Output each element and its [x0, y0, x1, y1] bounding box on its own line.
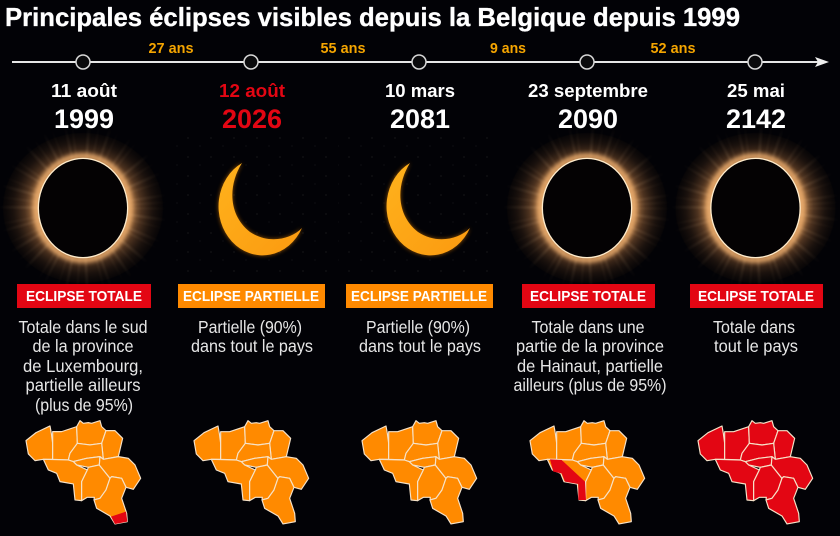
- interval labels: 55 ans: [320, 41, 366, 57]
- date: 11 août 1999: [51, 80, 117, 134]
- tag: eclipse partielle: [346, 284, 493, 308]
- description: ailleurs (plus de 95%): [514, 375, 666, 395]
- interval labels: 9 ans: [490, 41, 526, 57]
- map of Belgium: [698, 421, 813, 524]
- interval labels: [148, 41, 696, 57]
- description: Partielle (90%): [366, 317, 470, 337]
- date: 11 août 1999: 11 août: [51, 80, 117, 101]
- date: 10 mars 2081: [385, 80, 455, 134]
- date: 10 mars 2081: 2081: [390, 104, 450, 134]
- date: 12 août 2026: 12 août: [219, 80, 285, 101]
- map of Belgium: [362, 421, 477, 524]
- description: de Hainaut, partielle: [517, 356, 663, 376]
- timeline arrow: [12, 55, 829, 69]
- map of Belgium: [194, 421, 309, 524]
- icon: total eclipse: [674, 132, 836, 284]
- description: (plus de 95%): [35, 395, 133, 415]
- tag: eclipse totale: ECLIPSE TOTALE: [26, 288, 142, 305]
- date: 11 août 1999: 1999: [54, 104, 114, 134]
- map of Belgium: [530, 421, 645, 524]
- column: 2090: [506, 80, 668, 524]
- interval labels: 52 ans: [650, 41, 696, 57]
- tag: eclipse totale: ECLIPSE TOTALE: [530, 288, 646, 305]
- date: 25 mai 2142: 25 mai: [727, 80, 785, 101]
- description: Totale dans le sud: [18, 317, 148, 337]
- date: 23 septembre 2090: 23 septembre: [528, 80, 648, 101]
- description: [514, 317, 666, 395]
- description: partielle ailleurs: [26, 375, 141, 395]
- description: Totale dans: [713, 317, 795, 337]
- column: 1999: [2, 80, 164, 524]
- tag: eclipse partielle: [178, 284, 325, 308]
- description: dans tout le pays: [359, 336, 481, 356]
- icon: total eclipse: [506, 132, 668, 284]
- column: 2026: [170, 80, 330, 524]
- icon: total eclipse: [2, 132, 164, 284]
- description: [713, 317, 798, 356]
- title: Principales éclipses visibles depuis la Belgique depuis 1999: [5, 2, 740, 32]
- stars: [170, 135, 330, 275]
- icon: partial eclipse: [219, 163, 302, 255]
- date: 23 septembre 2090: 2090: [558, 104, 618, 134]
- description: Partielle (90%): [198, 317, 302, 337]
- description: [191, 317, 313, 356]
- tag: eclipse totale: [690, 284, 823, 308]
- description: [18, 317, 148, 415]
- stars: [338, 135, 498, 275]
- description: tout le pays: [714, 336, 798, 356]
- description: dans tout le pays: [191, 336, 313, 356]
- date: 12 août 2026: 2026: [222, 104, 282, 134]
- column: 2081: [338, 80, 498, 524]
- tag: eclipse totale: [522, 284, 655, 308]
- date: 25 mai 2142: [726, 80, 786, 134]
- tag: eclipse totale: [17, 284, 151, 308]
- description: [359, 317, 481, 356]
- tag: eclipse totale: ECLIPSE TOTALE: [698, 288, 814, 305]
- date: 12 août 2026: [219, 80, 285, 134]
- map of Belgium: [26, 421, 141, 524]
- description: de la province: [32, 336, 134, 356]
- interval labels: 27 ans: [148, 41, 194, 57]
- date: 10 mars 2081: 10 mars: [385, 80, 455, 101]
- column: 2142: [674, 80, 836, 524]
- description: de Luxembourg,: [23, 356, 143, 376]
- date: 25 mai 2142: 2142: [726, 104, 786, 134]
- tag: eclipse partielle: ECLIPSE PARTIELLE: [183, 288, 319, 305]
- date: 23 septembre 2090: [528, 80, 648, 134]
- tag: eclipse partielle: ECLIPSE PARTIELLE: [351, 288, 487, 305]
- description: Totale dans une: [532, 317, 644, 337]
- description: partie de la province: [516, 336, 664, 356]
- icon: partial eclipse: [387, 163, 470, 255]
